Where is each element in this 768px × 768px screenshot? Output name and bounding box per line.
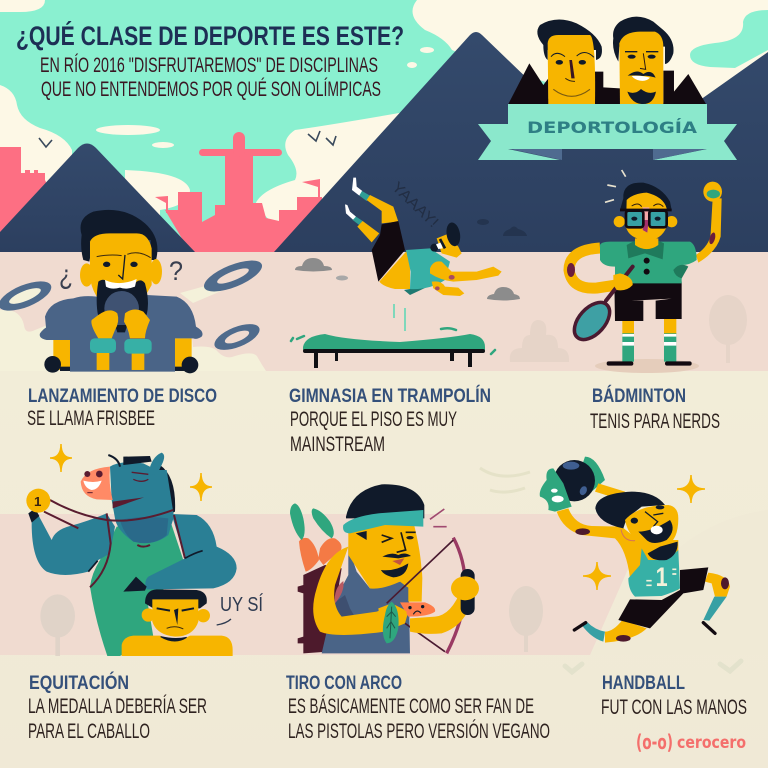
illustration: discus man: ?: [169, 256, 183, 286]
illustration: handball player: [480, 457, 730, 652]
logo: Deportología heads and banner: [478, 17, 737, 160]
logo: Deportología heads and banner: DEPORTOLOGÍA: [527, 118, 698, 137]
heading and text: trampoline: PORQUE EL PISO ES MUY: [290, 408, 457, 431]
heading and text: archery: TIRO CON ARCO: [286, 673, 402, 694]
heading and text: discus: SE LLAMA FRISBEE: [27, 407, 155, 430]
illustration: horse with medal: [26, 444, 263, 656]
heading and text: archery: LAS PISTOLAS PERO VERSIÓN VEGANO: [288, 720, 550, 743]
heading and text: trampoline: GIMNASIA EN TRAMPOLÍN: [289, 385, 491, 407]
decoration: tree and bush: [510, 295, 747, 363]
heading and text: badminton: [590, 385, 720, 433]
subtitle: EN RÍO 2016 "DISFRUTAREMOS" DE DISCIPLINAS: [40, 54, 378, 77]
illustration: horse with medal: UY SÍ: [220, 593, 263, 616]
illustration: badminton nerd: [567, 170, 722, 373]
heading and text: badminton: BÁDMINTON: [592, 385, 686, 407]
heading and text: archery: [286, 673, 550, 743]
heading and text: trampoline: [289, 385, 491, 456]
heading and text: equestrian: EQUITACIÓN: [29, 672, 129, 694]
illustration: trampoline jumper: YAAAY!: [388, 179, 442, 231]
heading and text: archery: ES BÁSICAMENTE COMO SER FAN DE: [288, 695, 534, 718]
illustration: handball player: 1: [656, 562, 668, 592]
logo: cerocero: [636, 730, 746, 754]
logo: cerocero: (o-o): [636, 730, 673, 754]
city skyline with Christ statue: [0, 132, 322, 252]
illustration: trampoline jumper: [291, 178, 520, 368]
subtitle: QUE NO ENTENDEMOS POR QUÉ SON OLÍMPICAS: [41, 78, 381, 101]
heading and text: handball: [601, 673, 747, 719]
heading and text: handball: HANDBALL: [602, 673, 685, 694]
heading and text: equestrian: [28, 672, 207, 743]
heading and text: trampoline: MAINSTREAM: [290, 433, 385, 456]
mountains: [0, 32, 768, 252]
heading and text: equestrian: PARA EL CABALLO: [28, 720, 150, 743]
illustration: discus man: ¿: [59, 259, 73, 290]
illustration: horse with medal: 1: [34, 494, 42, 509]
heading and text: discus: LANZAMIENTO DE DISCO: [28, 386, 217, 407]
birds: [39, 131, 336, 147]
heading and text: discus: [27, 386, 217, 430]
heading and text: equestrian: LA MEDALLA DEBERÍA SER: [28, 695, 207, 718]
title: ¿QUÉ CLASE DE DEPORTE ES ESTE?: [16, 20, 404, 51]
illustration: archer: [290, 484, 479, 653]
illustration: discus man: [0, 210, 332, 373]
subtitle: [40, 54, 381, 101]
logo: cerocero: cerocero: [677, 733, 746, 753]
